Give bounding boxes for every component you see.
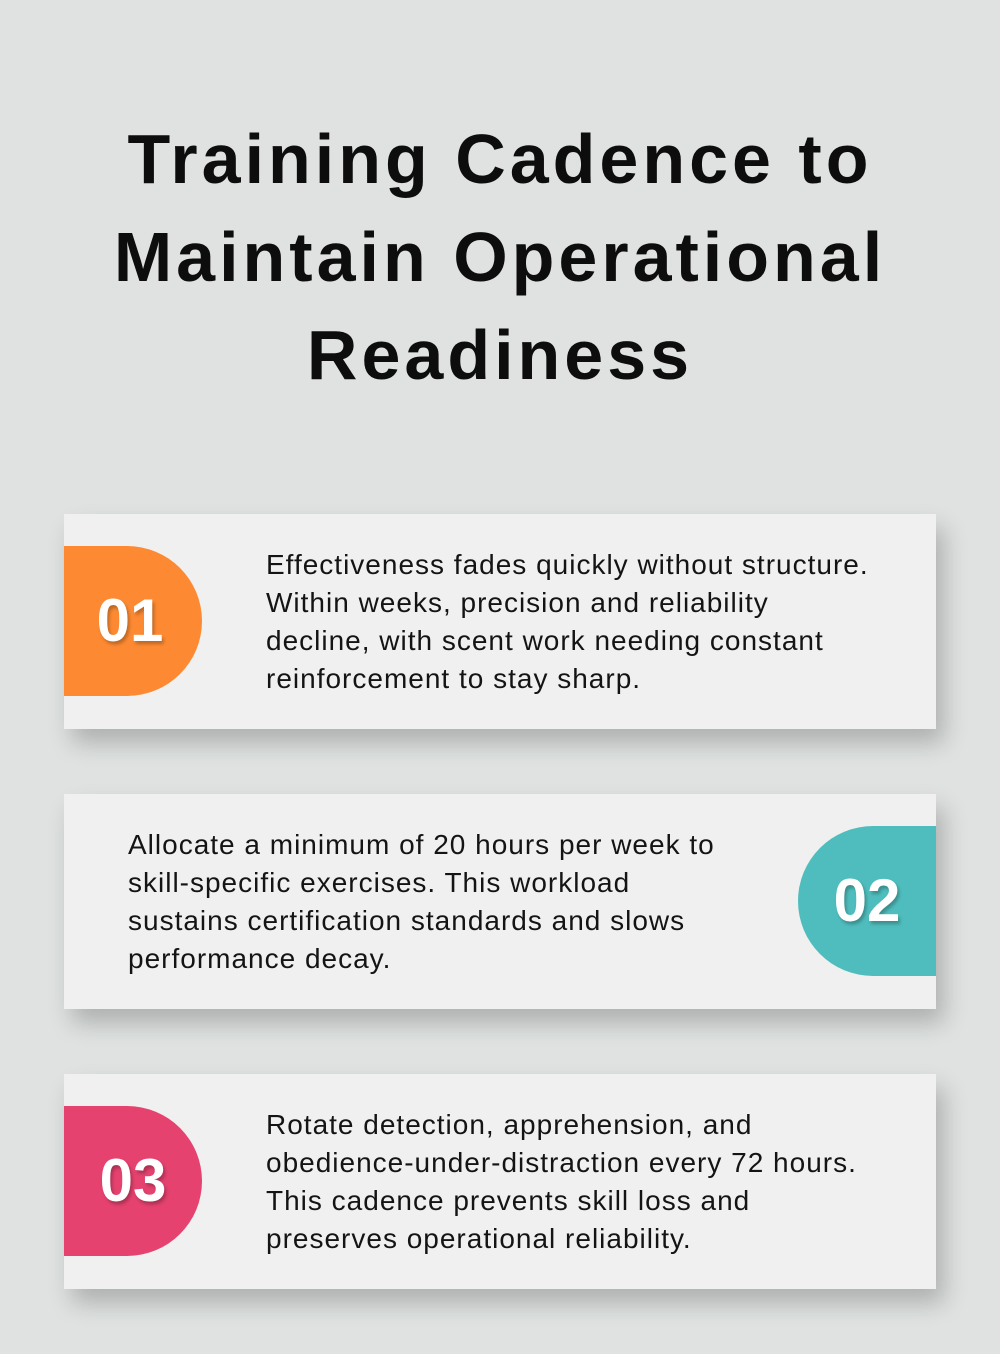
- text: step 01: Within weeks, precision and reliability: [266, 587, 769, 618]
- title: Training Cadence to: [128, 120, 872, 198]
- title: Readiness: [307, 316, 693, 394]
- panel: step 02: [64, 794, 936, 1009]
- text: step 01: [266, 549, 869, 694]
- text: step 02: Allocate a minimum of 20 hours per week to: [128, 829, 715, 860]
- panel: step 01: [64, 514, 936, 729]
- text: step 01: Effectiveness fades quickly without structure.: [266, 549, 869, 580]
- badge: 03: 03: [100, 1147, 166, 1214]
- badge: 01: [64, 546, 202, 696]
- title: Maintain Operational: [114, 218, 886, 296]
- text: step 02: skill-specific exercises. This workload: [128, 867, 630, 898]
- badge: 03: [64, 1106, 202, 1256]
- text: step 02: [128, 829, 715, 974]
- text: step 03: obedience-under-distraction every 72 hours.: [266, 1147, 857, 1178]
- text: step 02: performance decay.: [128, 943, 391, 974]
- text: step 01: decline, with scent work needing constant: [266, 625, 824, 656]
- text: step 03: Rotate detection, apprehension, and: [266, 1109, 752, 1140]
- text: step 03: [266, 1109, 857, 1254]
- badge: 02: 02: [834, 867, 900, 934]
- text: step 01: reinforcement to stay sharp.: [266, 663, 641, 694]
- badge: 02: [798, 826, 936, 976]
- panel: step 03: [64, 1074, 936, 1289]
- text: step 03: This cadence prevents skill loss and: [266, 1185, 750, 1216]
- badge: 01: 01: [97, 587, 163, 654]
- text: step 03: preserves operational reliability.: [266, 1223, 692, 1254]
- title: [114, 120, 886, 394]
- text: step 02: sustains certification standards and slows: [128, 905, 685, 936]
